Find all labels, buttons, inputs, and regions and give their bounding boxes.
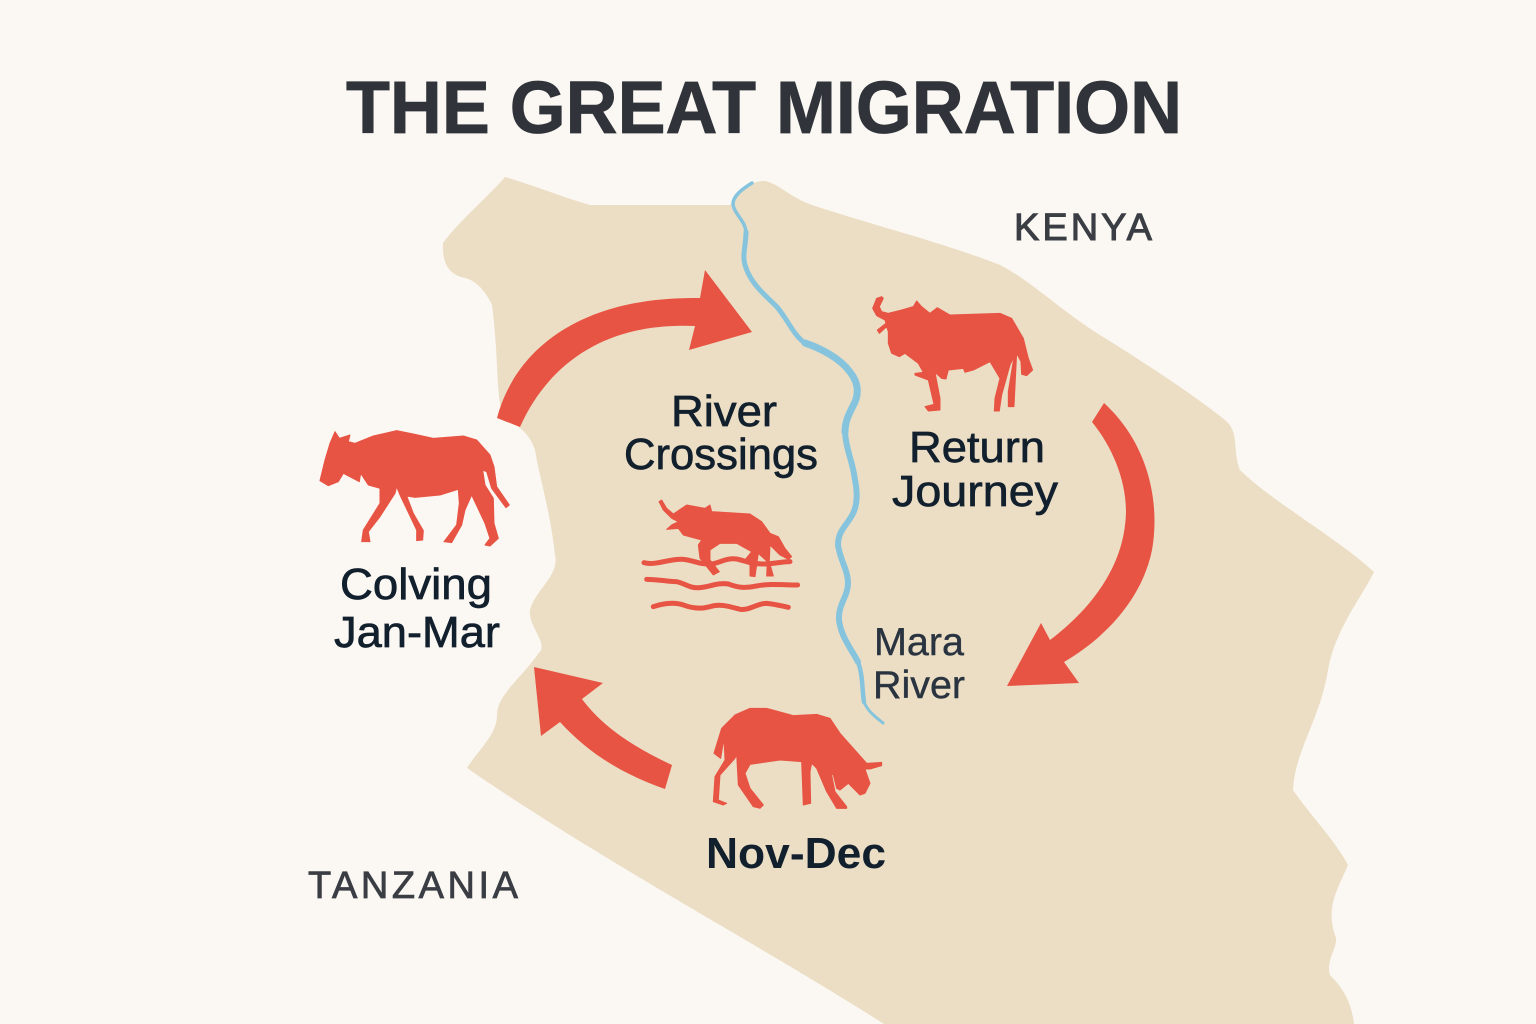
label: Mara River — [873, 621, 965, 707]
label: Mara River: River — [873, 664, 965, 707]
icon: wildebeest grazing — [713, 708, 882, 808]
Mara River — [733, 183, 883, 723]
label: Return Journey — [892, 423, 1058, 516]
arrow: calving to river crossings — [497, 270, 752, 427]
label: Mara River: Mara — [874, 621, 964, 664]
label: TANZANIA: TANZANIA — [308, 865, 519, 907]
label: River Crossings: River — [671, 387, 777, 436]
arrow: return journey going south — [1007, 403, 1154, 686]
label: Colving Jan-Mar: Jan-Mar — [334, 608, 500, 657]
label: River Crossings — [624, 387, 818, 479]
map landmass — [443, 177, 1374, 1024]
arrow: Nov-Dec to calving — [534, 667, 672, 789]
title: THE GREAT MIGRATION — [346, 66, 1182, 149]
label: Colving Jan-Mar — [334, 560, 500, 657]
icon: wildebeest crossing water — [644, 500, 798, 609]
label: Return Journey: Return — [909, 423, 1045, 472]
label: River Crossings: Crossings — [624, 430, 818, 479]
label: Colving Jan-Mar: Colving — [340, 560, 492, 609]
label: Return Journey: Journey — [892, 467, 1058, 516]
icon: wildebeest calving — [320, 431, 509, 546]
label: Nov-Dec: Nov-Dec — [706, 829, 886, 878]
label: KENYA: KENYA — [1014, 207, 1153, 249]
icon: wildebeest return journey — [873, 297, 1033, 411]
